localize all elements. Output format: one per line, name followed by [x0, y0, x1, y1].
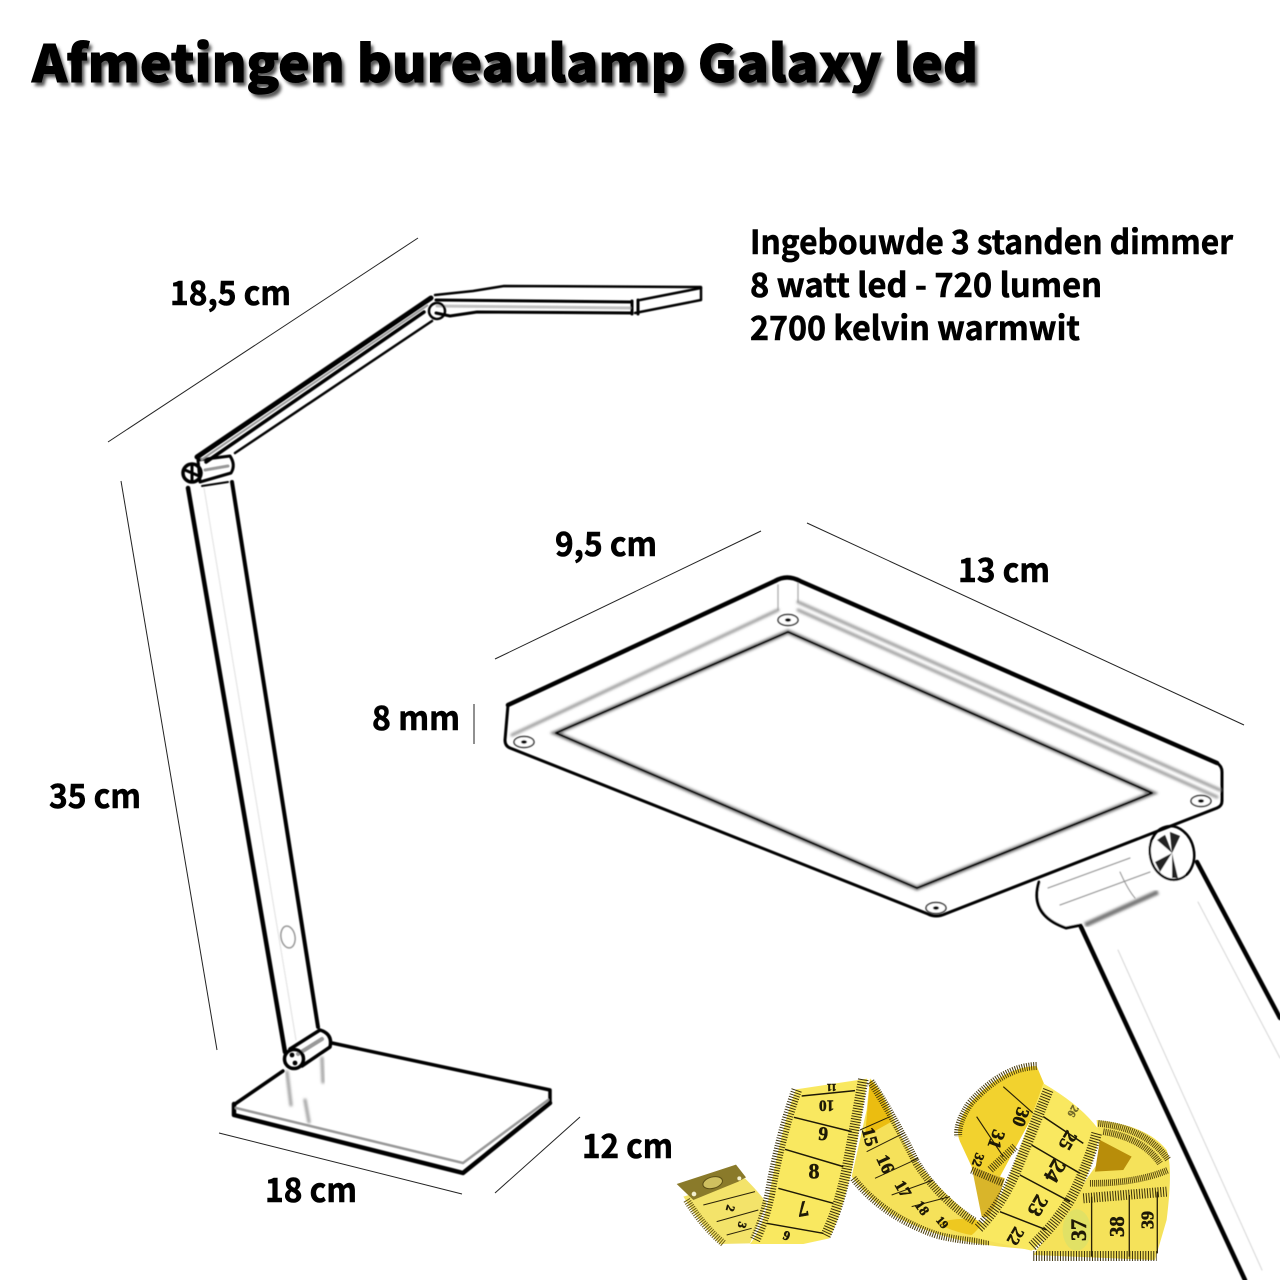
- dimension: head width 9,5 cm: [495, 518, 761, 659]
- tape section 6 to 11: 9: [817, 1124, 829, 1145]
- text block: specifications: Ingebouwde 3 standen dimmer: [750, 216, 1234, 264]
- back loop of tape: 32: [969, 1151, 988, 1169]
- illustration: close-up of lamp head: [505, 578, 1280, 1280]
- title: Afmetingen bureaulamp Galaxy led: [31, 23, 978, 97]
- dimension: base depth 12 cm: [495, 1117, 673, 1193]
- tape section 6 to 11: 8: [808, 1158, 819, 1183]
- illustration: yellow tape measure: [677, 1066, 1170, 1260]
- upper joint with knob: [183, 456, 233, 486]
- joint cylinder: [1037, 838, 1192, 928]
- rolled coil: 39: [1137, 1211, 1157, 1229]
- tape section 15 to 22: 17: [891, 1177, 915, 1201]
- tape section 15 to 22: 18: [911, 1199, 931, 1219]
- dimension: base width 18 cm: [219, 1133, 462, 1212]
- rolled coil: 37: [1066, 1219, 1091, 1241]
- light panel: [556, 632, 1152, 888]
- tape section 15 to 22: [852, 1078, 1037, 1250]
- rolled coil: 38: [1107, 1216, 1129, 1237]
- lamp head side view: [429, 286, 701, 319]
- corner screws: [514, 614, 1211, 914]
- tape section 22 to 26: 22: [1003, 1224, 1028, 1248]
- text block: specifications: 8 watt led - 720 lumen: [750, 259, 1102, 307]
- tape section 15 to 22: 19: [933, 1213, 952, 1232]
- tape section 15 to 22: 16: [872, 1151, 898, 1177]
- tape section 22 to 26: 24: [1039, 1155, 1071, 1187]
- tape section 22 to 26: 25: [1054, 1127, 1081, 1153]
- adjustment knob: [1145, 822, 1199, 884]
- back loop of tape: 30: [1007, 1105, 1033, 1129]
- back loop of tape: 31: [983, 1127, 1009, 1152]
- illustration: side view of desk lamp: [183, 286, 701, 1173]
- dimension: head width 9,5 cm: 9,5 cm: [555, 518, 657, 566]
- text block: specifications: 2700 kelvin warmwit: [750, 302, 1080, 350]
- rolled coil: [1033, 1120, 1170, 1260]
- dimension: height 35 cm: 35 cm: [49, 770, 141, 818]
- lower joint: [284, 1030, 331, 1068]
- tape section 22 to 26: [970, 1083, 1100, 1251]
- back loop of tape: [958, 1066, 1047, 1218]
- arm below head: [1081, 862, 1280, 1280]
- dimension: arm length 18,5 cm: 18,5 cm: [170, 267, 291, 315]
- tape section 15 to 22: 15: [857, 1125, 882, 1149]
- dimension: head thickness 8 mm: 8 mm: [372, 692, 460, 740]
- tape section 6 to 11: 7: [795, 1196, 811, 1222]
- lower arm: [188, 482, 318, 1052]
- tape section 1 to 3 with metal tip: [677, 1165, 767, 1244]
- head panel outline: [505, 578, 1222, 916]
- tape section 22 to 26: 23: [1022, 1191, 1052, 1220]
- dimension: base width 18 cm: 18 cm: [265, 1164, 357, 1212]
- tape section 1 to 3 with metal tip: 2: [723, 1204, 738, 1213]
- tape section 22 to 26: 26: [1064, 1103, 1081, 1119]
- upper arm: [197, 298, 432, 462]
- metal end cap: [677, 1165, 746, 1200]
- tape section 1 to 3 with metal tip: 3: [735, 1220, 750, 1230]
- tape section 6 to 11: 10: [819, 1097, 834, 1114]
- dimension: head length 13 cm: [807, 523, 1244, 725]
- text block: specifications: [750, 216, 1234, 350]
- dimension: arm length 18,5 cm: [108, 238, 418, 442]
- dimension: base depth 12 cm: 12 cm: [582, 1120, 673, 1168]
- dimension: height 35 cm: [49, 481, 217, 1050]
- title: Afmetingen bureaulamp Galaxy led: [34, 27, 981, 101]
- tape section 6 to 11: [750, 1079, 867, 1244]
- dimension: head length 13 cm: 13 cm: [958, 544, 1050, 592]
- tape section 6 to 11: 6: [780, 1228, 792, 1244]
- lamp base: [234, 1043, 550, 1173]
- tape section 6 to 11: 11: [827, 1081, 837, 1092]
